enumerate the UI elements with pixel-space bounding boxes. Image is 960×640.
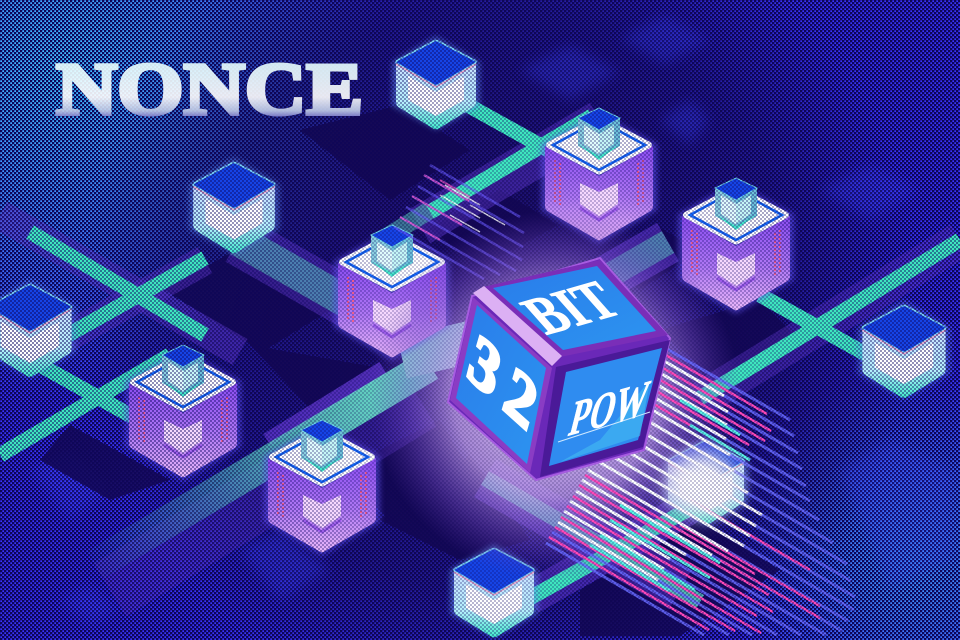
teal cube far right	[858, 301, 950, 399]
dark isometric platforms	[40, 105, 800, 636]
road junction pale	[402, 342, 470, 358]
cube outline	[448, 258, 670, 480]
teal cube top	[392, 36, 480, 130]
BIT text: BIT	[509, 271, 634, 346]
pink streaks	[549, 350, 820, 633]
purple cube lower	[264, 420, 380, 556]
left face	[450, 297, 554, 473]
main road	[95, 365, 430, 565]
right face	[540, 340, 670, 477]
main cube: 32 BIT POW	[448, 258, 670, 480]
roads	[0, 98, 960, 602]
lower right light streaks	[546, 345, 855, 635]
purple cube right	[678, 178, 794, 314]
background cyan dots lower right	[741, 387, 960, 640]
white streaks	[558, 355, 762, 580]
top face	[473, 260, 668, 366]
purple lanes	[0, 120, 960, 598]
title: NONCE: NONCE	[56, 49, 363, 131]
purple cube centre	[334, 225, 450, 361]
bright teal roads	[0, 98, 960, 598]
teal cube bottom	[450, 544, 538, 638]
background cyan dots upper left	[0, 0, 356, 380]
POW text: POW	[564, 369, 655, 448]
upper light streaks	[394, 165, 524, 279]
teal cube far left	[0, 280, 76, 378]
teal cube upper left	[189, 158, 279, 254]
32 text: 32	[461, 318, 554, 454]
purple cube upper right	[541, 108, 657, 244]
cyan streaks	[590, 400, 750, 591]
light burst	[666, 452, 738, 516]
purple cube left	[125, 345, 241, 481]
teal cube under light	[664, 436, 748, 526]
blue lilac streaks	[546, 345, 855, 635]
translucent teal roads	[238, 210, 700, 602]
central halo	[370, 210, 740, 580]
